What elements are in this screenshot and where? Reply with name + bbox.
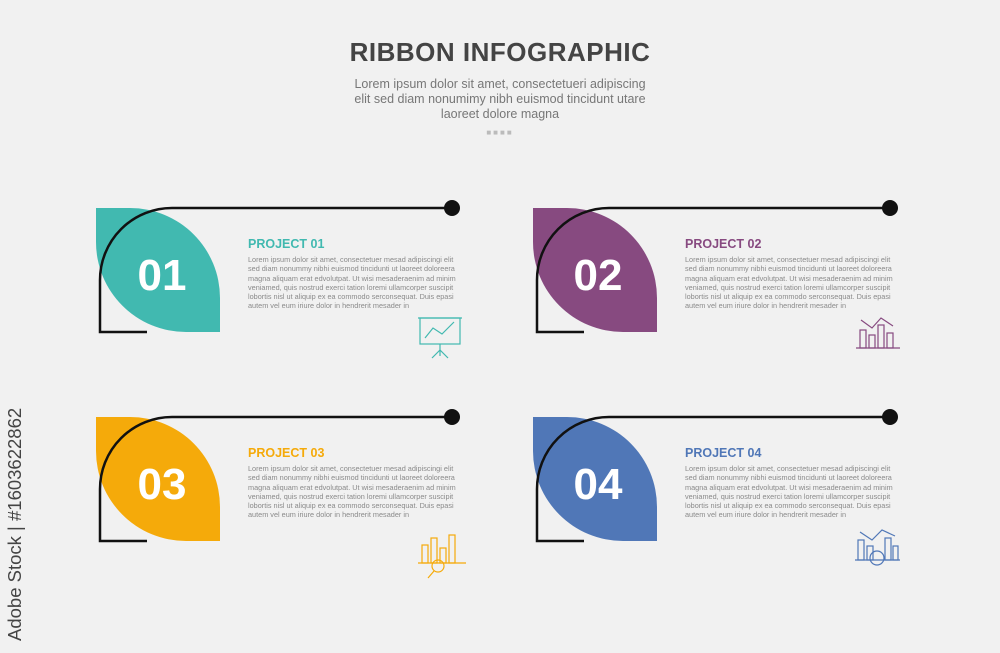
- text block 02: [685, 237, 893, 310]
- text: veniamed, quis nostrud exerci tation loremi ullamcorper suscipit: [248, 492, 453, 501]
- text block 03: [248, 446, 456, 519]
- subtitle: elit sed diam nonumimy nibh euismod tincidunt utare: [354, 92, 646, 106]
- text: sed diam nonummy nibhi euismod tincidunti ut laoreet doloreera: [248, 473, 455, 482]
- text: veniamed, quis nostrud exerci tation loremi ullamcorper suscipit: [685, 283, 890, 292]
- card 01 shape: [96, 200, 460, 332]
- text: autem vel eum iriure dolor in hendrerit mesader in: [685, 301, 846, 310]
- text: lobortis nisl ut aliquip ex ea commodo serconsequat. Duis epasi: [685, 292, 891, 301]
- watermark side text: Adobe Stock | #1603622862: [4, 408, 25, 641]
- subtitle: [354, 77, 646, 121]
- text: autem vel eum iriure dolor in hendrerit mesader in: [248, 301, 409, 310]
- dots: ■■■■: [486, 128, 514, 137]
- text: lobortis nisl ut aliquip ex ea commodo serconsequat. Duis epasi: [248, 292, 454, 301]
- text block 04: [685, 446, 893, 519]
- subtitle: laoreet dolore magna: [441, 107, 559, 121]
- card 04 shape: 04: [574, 460, 623, 509]
- text: PROJECT 03: [248, 446, 324, 460]
- text: sed diam nonummy nibhi euismod tincidunti ut laoreet doloreera: [685, 473, 892, 482]
- text: magna aliquam erat edvolutpat. Ut wisi mesaderaenim ad minim: [248, 274, 456, 283]
- text: sed diam nonummy nibhi euismod tincidunti ut laoreet doloreera: [248, 264, 455, 273]
- text: Lorem ipsum dolor sit amet, consectetuer mesad adipiscingi elit: [248, 255, 453, 264]
- icon: presentation board: [418, 318, 462, 358]
- text: Lorem ipsum dolor sit amet, consectetuer mesad adipiscingi elit: [685, 255, 890, 264]
- icon: chart with pie: [855, 530, 900, 565]
- title: RIBBON INFOGRAPHIC: [350, 37, 650, 67]
- text: lobortis nisl ut aliquip ex ea commodo serconsequat. Duis epasi: [248, 501, 454, 510]
- card 02 shape: [533, 200, 898, 332]
- icon: bar chart: [856, 318, 900, 348]
- text: magna aliquam erat edvolutpat. Ut wisi mesaderaenim ad minim: [685, 274, 893, 283]
- text: autem vel eum iriure dolor in hendrerit mesader in: [685, 510, 846, 519]
- text: PROJECT 04: [685, 446, 761, 460]
- card 03 shape: 03: [138, 460, 186, 509]
- text: magna aliquam erat edvolutpat. Ut wisi mesaderaenim ad minim: [248, 483, 456, 492]
- card 03 shape: [96, 409, 460, 541]
- text: Lorem ipsum dolor sit amet, consectetuer mesad adipiscingi elit: [685, 464, 890, 473]
- text: sed diam nonummy nibhi euismod tincidunti ut laoreet doloreera: [685, 264, 892, 273]
- text: lobortis nisl ut aliquip ex ea commodo serconsequat. Duis epasi: [685, 501, 891, 510]
- card 04 shape: [533, 409, 898, 541]
- text: Lorem ipsum dolor sit amet, consectetuer mesad adipiscingi elit: [248, 464, 453, 473]
- text: magna aliquam erat edvolutpat. Ut wisi mesaderaenim ad minim: [685, 483, 893, 492]
- text: PROJECT 02: [685, 237, 761, 251]
- card 01 shape: 01: [138, 251, 186, 300]
- text: autem vel eum iriure dolor in hendrerit mesader in: [248, 510, 409, 519]
- subtitle: Lorem ipsum dolor sit amet, consectetueri adipiscing: [354, 77, 646, 91]
- text: veniamed, quis nostrud exerci tation loremi ullamcorper suscipit: [248, 283, 453, 292]
- text: veniamed, quis nostrud exerci tation loremi ullamcorper suscipit: [685, 492, 890, 501]
- text: PROJECT 01: [248, 237, 324, 251]
- icon: chart with magnifier: [418, 535, 466, 578]
- text block 01: [248, 237, 456, 310]
- card 02 shape: 02: [574, 251, 622, 300]
